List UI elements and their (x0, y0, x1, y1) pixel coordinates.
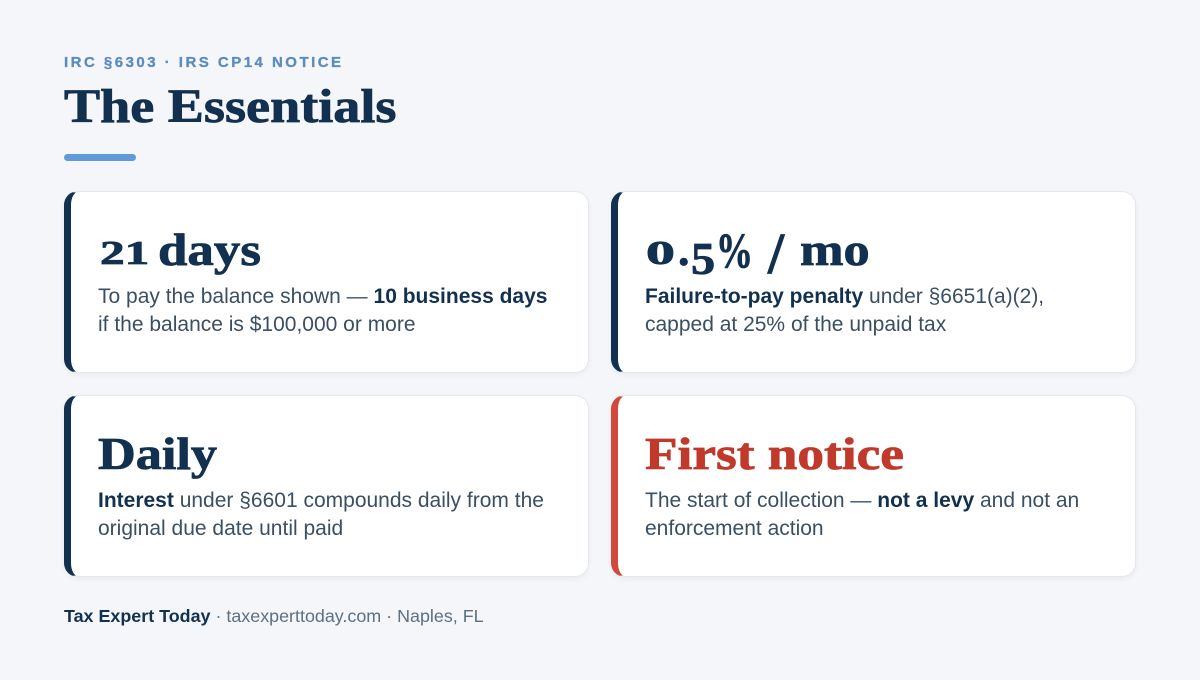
stat: 21 days (100, 224, 261, 275)
description: interest (98, 489, 544, 540)
stat: 21 days: 21 (100, 235, 149, 272)
stat: 0.5% per month: / (768, 221, 784, 286)
stat: 0.5% per month: mo (800, 224, 870, 275)
panel: penalty rate (611, 191, 1136, 373)
title: The Essentials (64, 80, 396, 133)
stat: 0.5% per month: 0 (646, 235, 675, 272)
description: start of collection (645, 489, 1079, 540)
description: pay deadline (98, 285, 547, 336)
stat: 21 days: days (158, 224, 261, 275)
description: start of collection: The start of collection — not a levy and not an (645, 489, 1079, 512)
stat: First notice: First notice (645, 428, 904, 479)
stat: 0.5% per month: . (678, 224, 690, 275)
description: failure-to-pay penalty: capped at 25% of the unpaid tax (645, 313, 946, 336)
footer: Tax Expert Today · taxexperttoday.com · Naples, FL (64, 606, 484, 626)
description: interest: Interest under §6601 compounds daily from the (98, 489, 544, 512)
description: failure-to-pay penalty (645, 285, 1044, 336)
panel: first notice (611, 395, 1136, 577)
description: pay deadline: To pay the balance shown — 10 business days (98, 285, 547, 308)
description: failure-to-pay penalty: Failure-to-pay penalty under §6651(a)(2), (645, 285, 1044, 308)
panel: daily interest (64, 395, 589, 577)
stat: Daily: Daily (98, 428, 217, 479)
description: interest: original due date until paid (98, 517, 343, 540)
stat: 0.5% per month (646, 221, 870, 286)
accent bar (64, 154, 136, 161)
description: start of collection: enforcement action (645, 517, 824, 540)
stat: 0.5% per month: % (716, 222, 753, 278)
description: pay deadline: if the balance is $100,000 or more (98, 313, 416, 336)
eyebrow: IRC §6303 · IRS CP14 NOTICE (64, 54, 344, 71)
panel: 21 days (64, 191, 589, 373)
stat: 0.5% per month: 5 (691, 232, 715, 284)
